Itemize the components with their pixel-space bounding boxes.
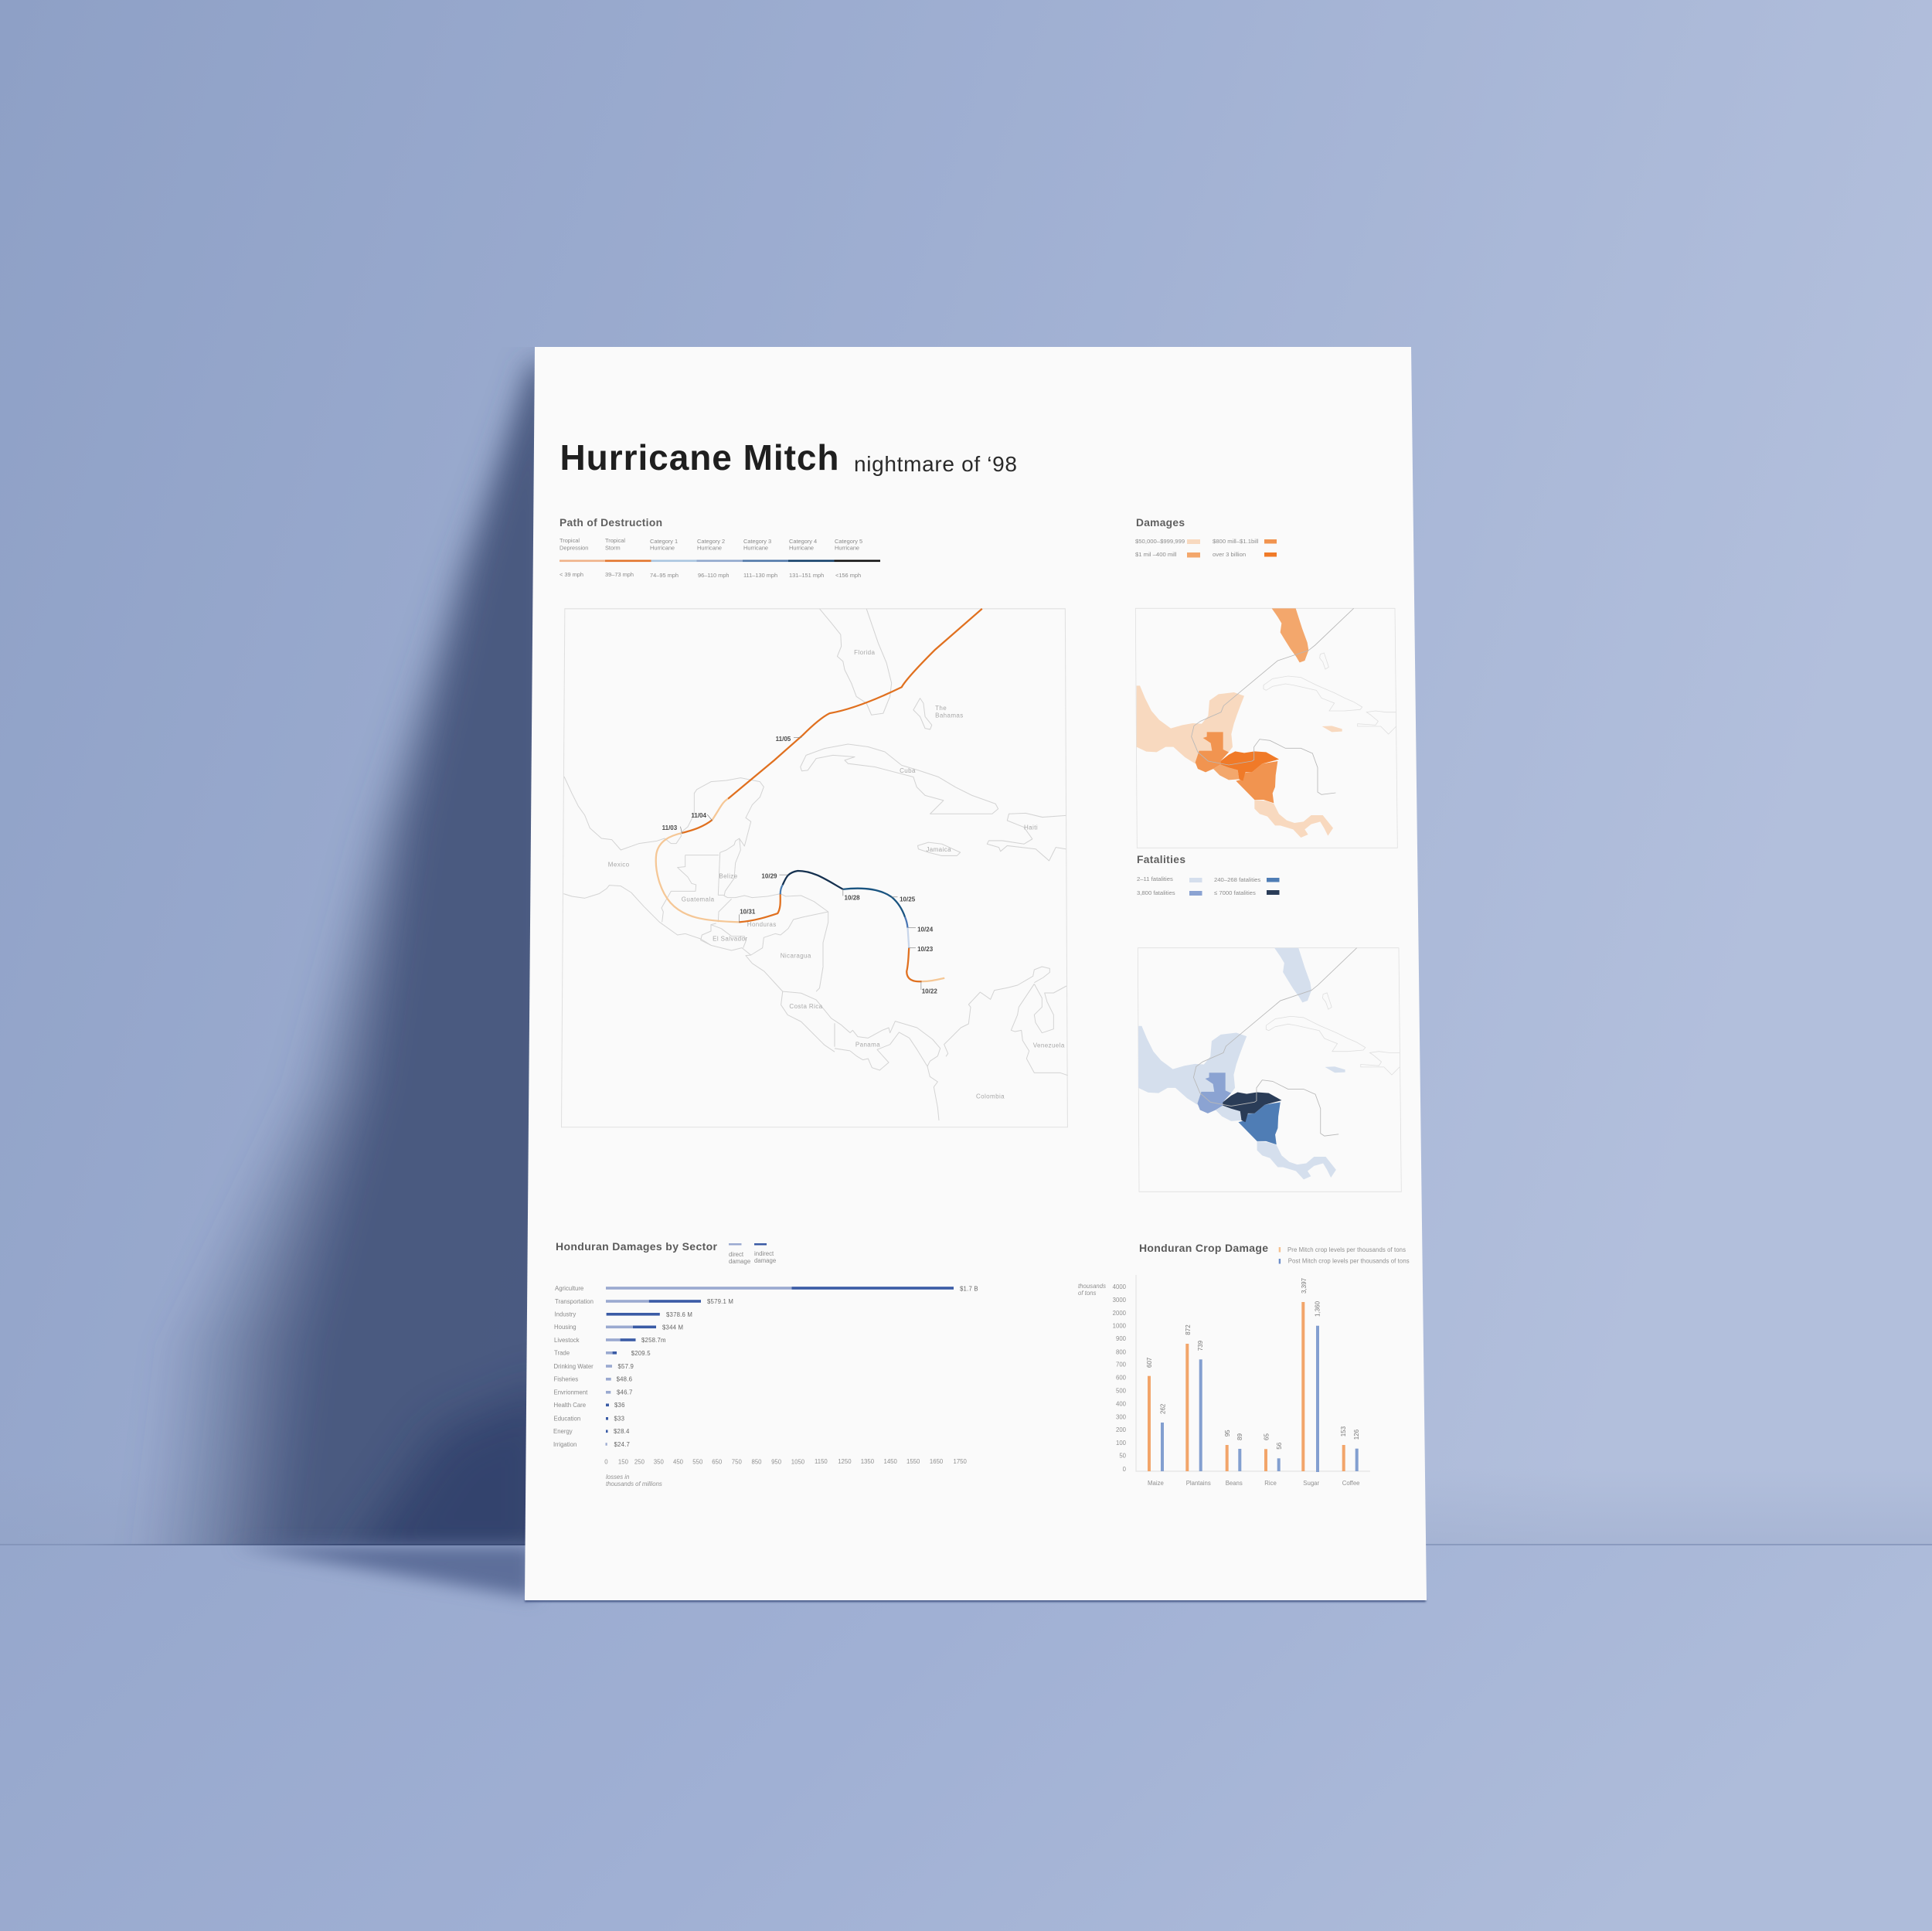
sector names: Livestock — [554, 1337, 580, 1344]
crop bar values: 1,360 — [1314, 1300, 1321, 1317]
crop y axis labels: 500 — [1116, 1388, 1127, 1394]
map coastlines panama and south america — [850, 967, 1068, 1120]
sector values: $57.9 — [618, 1363, 634, 1370]
sector names — [553, 1285, 594, 1448]
map coastlines central america — [563, 777, 828, 966]
legend speed labels: 96–110 mph — [698, 572, 730, 579]
country labels: The — [935, 705, 947, 712]
date labels: 10/28 — [845, 895, 860, 902]
crop bar values: 3,397 — [1301, 1277, 1308, 1294]
damages legend entries: $50,000–$999,999 — [1135, 538, 1185, 545]
country fills — [1137, 608, 1342, 838]
sector axis labels: 1350 — [861, 1458, 875, 1465]
date labels — [662, 736, 937, 994]
legend category labels: Hurricane — [697, 544, 722, 552]
legend category labels: Tropical — [605, 537, 625, 544]
crop y axis labels: 700 — [1116, 1362, 1127, 1368]
sector values — [614, 1286, 978, 1448]
crop category labels: Beans — [1226, 1480, 1243, 1487]
sector names: Transportation — [555, 1298, 594, 1305]
country labels: Belize — [719, 873, 738, 880]
sector axis labels: 450 — [673, 1459, 684, 1465]
date labels: 10/22 — [922, 988, 937, 994]
date labels: 10/23 — [917, 946, 934, 953]
sector names: Irrigation — [553, 1441, 577, 1448]
country labels: Bahamas — [935, 712, 964, 719]
damages legend entries — [1135, 538, 1277, 558]
map frame — [1135, 608, 1397, 848]
legend category labels: Category 5 — [835, 538, 862, 545]
panel: honduran damages by sector — [553, 1240, 978, 1487]
country labels: Guatemala — [682, 896, 715, 903]
legend category labels — [560, 537, 862, 552]
sector names: Envrionment — [553, 1389, 588, 1396]
panel: path legend — [560, 517, 880, 579]
crop bar values: 95 — [1224, 1430, 1231, 1436]
heading: path of destruction: Path of Destruction — [560, 517, 662, 529]
crop y axis labels: 400 — [1116, 1400, 1127, 1408]
legend speed labels: <156 mph — [835, 572, 861, 579]
sector legend: damage — [729, 1258, 750, 1265]
sector values: $28.4 — [614, 1428, 630, 1435]
crop category labels — [1148, 1480, 1360, 1487]
panel: main hurricane path map — [562, 609, 1067, 1127]
crop y axis caption — [1078, 1283, 1106, 1297]
legend category labels: Category 3 — [743, 538, 771, 545]
crop category labels: Plantains — [1186, 1480, 1211, 1487]
country labels: Colombia — [976, 1093, 1005, 1100]
sector values: $1.7 B — [960, 1286, 978, 1292]
sector axis labels: 1250 — [838, 1458, 852, 1465]
crop bars — [1148, 1302, 1359, 1472]
crop bar values: 739 — [1197, 1340, 1204, 1351]
sector names: Drinking Water — [553, 1363, 594, 1370]
fatalities legend entries — [1137, 875, 1280, 896]
date labels: 11/03 — [662, 824, 678, 831]
sector legend: damage — [754, 1257, 776, 1264]
sector names: Energy — [553, 1428, 573, 1435]
crop legend: Pre Mitch crop levels per thousands of tons — [1287, 1246, 1406, 1253]
sector axis labels: 250 — [634, 1459, 645, 1465]
crop bar values: 126 — [1353, 1429, 1360, 1440]
legend speed labels: 74–95 mph — [650, 572, 679, 579]
damages legend entries: over 3 billion — [1213, 551, 1246, 558]
date labels: 10/31 — [740, 908, 756, 915]
crop bar values: 89 — [1236, 1433, 1243, 1440]
storm path line — [1192, 608, 1354, 794]
heading: damages by sector: Honduran Damages by Sector — [556, 1240, 718, 1253]
sector axis caption: losses in — [606, 1474, 629, 1481]
damages legend entries: $1 mil –400 mill — [1135, 551, 1177, 558]
sector axis caption: thousands of millions — [606, 1481, 662, 1487]
fatalities legend entries: ≤ 7000 fatalities — [1214, 889, 1256, 896]
sector values: $258.7m — [641, 1337, 666, 1344]
sector axis labels: 1750 — [954, 1458, 968, 1465]
sector names: Health Care — [553, 1402, 586, 1409]
sector axis labels: 1650 — [930, 1458, 944, 1465]
subtitle: nightmare of ‘98 — [854, 452, 1017, 476]
sector legend: direct — [729, 1251, 744, 1258]
sector names: Housing — [554, 1324, 577, 1331]
sector bars — [606, 1287, 954, 1446]
crop bar values: 56 — [1276, 1442, 1283, 1450]
country labels: Cuba — [900, 767, 916, 774]
country labels: Jamaica — [926, 846, 951, 853]
fatalities legend entries: 3,800 fatalities — [1137, 889, 1175, 896]
crop y axis labels: 300 — [1116, 1414, 1127, 1420]
crop y axis labels: 0 — [1123, 1466, 1127, 1473]
crop y axis labels: 100 — [1116, 1440, 1127, 1447]
legend speed labels: 111–130 mph — [743, 572, 777, 579]
date ticks — [680, 737, 921, 990]
country labels: Florida — [854, 649, 876, 656]
legend category labels: Category 4 — [789, 538, 817, 545]
legend category labels: Depression — [560, 544, 588, 552]
legend colour scale — [560, 559, 880, 562]
sector names: Trade — [554, 1349, 570, 1357]
crop y axis labels: 50 — [1119, 1453, 1127, 1459]
panel: damages legend — [1135, 517, 1277, 558]
sector axis labels: 650 — [712, 1459, 723, 1465]
panel: fatalities map — [1138, 948, 1401, 1192]
floor shadow — [232, 1545, 533, 1598]
country labels — [608, 649, 1065, 1100]
sector values: $378.6 M — [666, 1311, 692, 1318]
map frame — [1138, 948, 1401, 1192]
crop category labels: Coffee — [1342, 1480, 1360, 1487]
heading: crop damage: Honduran Crop Damage — [1139, 1242, 1268, 1254]
legend category labels: Storm — [605, 544, 621, 552]
panel: damages map — [1135, 608, 1397, 848]
crop bar values — [1146, 1277, 1360, 1450]
sector values: $36 — [614, 1402, 625, 1409]
sector axis labels: 1550 — [906, 1458, 920, 1465]
legend category labels: Category 2 — [697, 538, 725, 545]
title: Hurricane Mitch — [560, 437, 839, 478]
legend speed labels: 131–151 mph — [789, 572, 824, 579]
crop y axis caption: thousands — [1078, 1283, 1106, 1290]
sector values: $209.5 — [631, 1350, 651, 1357]
crop legend — [1279, 1246, 1410, 1265]
island outlines — [1264, 653, 1396, 734]
fatalities legend entries: 2–11 fatalities — [1137, 875, 1173, 882]
crop y axis labels: 4000 — [1113, 1283, 1127, 1290]
crop category labels: Maize — [1148, 1480, 1164, 1487]
wall floor seam — [0, 1544, 1932, 1545]
crop y axis labels: 2000 — [1113, 1310, 1127, 1317]
map coastlines upper and east — [752, 609, 1066, 1052]
crop y axis caption: of tons — [1078, 1290, 1097, 1297]
sector values: $46.7 — [617, 1389, 633, 1396]
seam inside shadow — [77, 1544, 533, 1545]
sector axis labels: 550 — [692, 1459, 703, 1465]
crop y axis labels: 1000 — [1113, 1323, 1127, 1329]
poster sheet — [525, 347, 1427, 1600]
legend category labels: Hurricane — [789, 544, 814, 552]
date labels: 10/24 — [917, 926, 934, 933]
sector values: $24.7 — [614, 1441, 630, 1448]
wall darkening near floor — [0, 1468, 1932, 1545]
date labels: 11/05 — [776, 736, 791, 743]
map frame — [562, 609, 1067, 1127]
sector axis labels: 1050 — [791, 1459, 805, 1465]
heading: fatalities: Fatalities — [1137, 854, 1185, 865]
crop y axis labels: 200 — [1116, 1426, 1127, 1433]
sector axis labels: 150 — [618, 1459, 629, 1465]
sector names: Industry — [555, 1311, 576, 1318]
crop y axis labels: 3000 — [1113, 1297, 1127, 1304]
legend speed labels — [560, 571, 861, 579]
country labels: Mexico — [608, 861, 630, 868]
country labels: Haiti — [1024, 824, 1038, 831]
country labels: Honduras — [747, 921, 777, 928]
country labels: Venezuela — [1033, 1042, 1065, 1049]
sector axis labels: 350 — [654, 1459, 664, 1465]
crop axes — [1136, 1275, 1370, 1471]
crop bar values: 65 — [1263, 1433, 1270, 1440]
legend category labels: Tropical — [560, 537, 580, 544]
country labels: Panama — [855, 1042, 880, 1049]
crop bar values: 607 — [1146, 1357, 1153, 1368]
crop y axis labels: 900 — [1116, 1335, 1127, 1342]
fatalities legend entries: 240–268 fatalities — [1214, 876, 1260, 883]
legend category labels: Hurricane — [743, 544, 768, 552]
panel: fatalities legend — [1137, 854, 1280, 896]
sector names: Fisheries — [553, 1375, 578, 1383]
wall shadow cast by poster — [153, 350, 535, 1544]
sector axis caption — [606, 1474, 662, 1487]
legend category labels: Category 1 — [650, 538, 678, 545]
sector legend — [729, 1243, 776, 1265]
country labels: El Salvador — [713, 936, 747, 943]
date labels: 10/29 — [761, 873, 777, 880]
crop bar values: 872 — [1185, 1324, 1192, 1335]
legend speed labels: 39–73 mph — [605, 571, 634, 578]
crop y axis labels — [1113, 1283, 1127, 1473]
crop bar values: 153 — [1340, 1426, 1347, 1436]
sector axis labels: 1150 — [815, 1458, 828, 1465]
main map overlays — [608, 609, 1065, 1100]
sector names: Education — [553, 1416, 580, 1422]
sector legend: indirect — [754, 1250, 774, 1257]
sector axis labels: 0 — [604, 1459, 608, 1465]
sector values: $579.1 M — [707, 1298, 733, 1305]
country labels: Nicaragua — [781, 952, 811, 959]
sector values: $48.6 — [617, 1375, 632, 1383]
sector names: Agriculture — [555, 1285, 583, 1292]
sector axis labels: 750 — [732, 1459, 742, 1465]
crop category labels: Sugar — [1303, 1480, 1320, 1487]
sector axis labels — [604, 1458, 968, 1465]
poster base shadow — [525, 1600, 1426, 1602]
panel: honduran crop damage — [1078, 1242, 1410, 1487]
sector axis labels: 850 — [751, 1459, 762, 1465]
sector axis labels: 1450 — [884, 1458, 898, 1465]
heading: damages: Damages — [1136, 517, 1185, 529]
country labels: Costa Rica — [789, 1003, 823, 1010]
crop category labels: Rice — [1264, 1480, 1277, 1487]
date labels: 10/25 — [900, 896, 916, 903]
crop legend: Post Mitch crop levels per thousands of tons — [1288, 1258, 1410, 1265]
sector values: $33 — [614, 1416, 624, 1422]
crop y axis labels: 800 — [1116, 1349, 1127, 1355]
sector axis labels: 950 — [771, 1459, 782, 1465]
crop bar values: 262 — [1159, 1403, 1167, 1414]
hurricane track — [656, 609, 982, 981]
legend category labels: Hurricane — [835, 544, 859, 552]
fatalities map contents — [1138, 948, 1400, 1179]
background floor — [0, 1545, 1932, 1931]
date labels: 11/04 — [691, 812, 707, 819]
crop y axis labels: 600 — [1116, 1374, 1127, 1382]
damages legend entries: $800 mill–$1.1bill — [1213, 538, 1259, 545]
sector values: $344 M — [662, 1324, 683, 1331]
legend speed labels: < 39 mph — [560, 571, 583, 578]
legend category labels: Hurricane — [650, 544, 675, 552]
